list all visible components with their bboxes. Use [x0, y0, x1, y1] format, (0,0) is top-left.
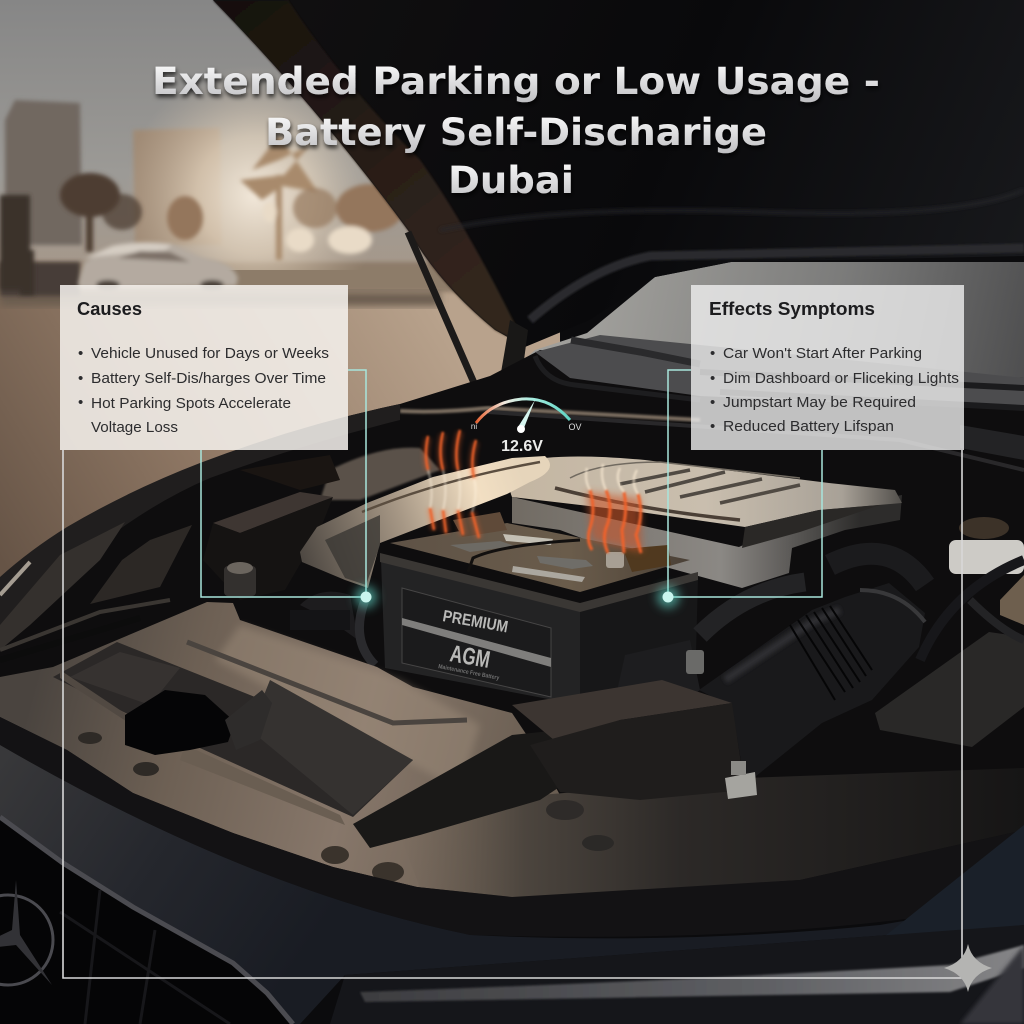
- cover right side: [512, 495, 902, 588]
- icon: sparkle: [944, 944, 992, 992]
- battery label text: Maintenance Free Battery: [438, 664, 500, 682]
- gauge low label: ni: [471, 422, 477, 431]
- white frame: [63, 450, 962, 978]
- sensor module: [615, 640, 700, 715]
- causes list: Battery Self-Dis/harges Over Time: [91, 370, 326, 387]
- cover left front: [300, 456, 550, 588]
- battery side body: [580, 578, 698, 705]
- connector: effects: [668, 370, 822, 597]
- bolts: [78, 732, 102, 744]
- engine bay: [0, 335, 1024, 900]
- effects list: Car Won't Start After Parking: [723, 345, 922, 362]
- causes list: Hot Parking Spots Accelerate: [91, 395, 291, 412]
- title: Battery Self-Discharige: [265, 111, 767, 154]
- battery label text: AGM: [448, 640, 492, 674]
- connector node right: [657, 586, 679, 608]
- battery front face: [381, 560, 580, 705]
- engine cover: [300, 456, 902, 588]
- left fender and brackets: [0, 404, 400, 660]
- grille and emblem: [0, 817, 293, 1024]
- effects list: Jumpstart May be Required: [723, 394, 916, 411]
- effects list: [710, 345, 959, 435]
- cover right top: [510, 456, 902, 527]
- gauge needle: [518, 400, 535, 428]
- dark channel and box: [353, 730, 600, 848]
- battery top: [390, 523, 690, 592]
- lower bay hoses: [290, 592, 375, 665]
- heat waves right: [586, 464, 642, 553]
- battery label text: PREMIUM: [441, 607, 509, 636]
- causes list: •: [78, 370, 83, 387]
- raised hood: [213, 0, 1024, 347]
- back left engine parts: [320, 448, 440, 500]
- heat waves left: [426, 430, 479, 538]
- hood latch: [125, 690, 235, 755]
- connector node left: [355, 586, 377, 608]
- flexible hose: [700, 582, 805, 635]
- connector: causes: [201, 370, 366, 597]
- bumper: [330, 925, 1024, 1024]
- windshield: [480, 262, 1024, 410]
- effects list: •: [710, 394, 715, 411]
- skyline buildings: [5, 100, 222, 245]
- lip rim: [0, 717, 1024, 937]
- plate recess: [53, 642, 413, 817]
- effects list: •: [710, 418, 715, 435]
- causes list: Vehicle Unused for Days or Weeks: [91, 345, 329, 362]
- panel: causes: [60, 285, 348, 450]
- causes list: Voltage Loss: [91, 419, 178, 436]
- plate groove: [187, 642, 467, 723]
- body pipe: [400, 408, 700, 420]
- title: Extended Parking or Low Usage -: [152, 60, 880, 103]
- lower dark panel: [400, 768, 1024, 900]
- hood prop rod: [408, 232, 528, 392]
- effects heading: Effects Symptoms: [709, 298, 875, 319]
- tan plate: [0, 602, 600, 897]
- gauge zero label: OV: [568, 422, 582, 432]
- effects list: Reduced Battery Lifspan: [723, 418, 894, 435]
- battery label text: [438, 607, 509, 682]
- battery: [380, 512, 698, 705]
- causes heading: Causes: [77, 298, 142, 319]
- causes list: •: [78, 394, 83, 411]
- effects list: •: [710, 370, 715, 387]
- right engine parts: [875, 517, 1024, 747]
- panel: effects symptoms: [691, 285, 964, 450]
- lip body: [0, 745, 1024, 1024]
- icon: car emblem star: [0, 880, 53, 985]
- voltage gauge: [471, 399, 582, 455]
- effects list: •: [710, 345, 715, 362]
- front radiator support panel: [0, 602, 1024, 900]
- parked car: [78, 243, 238, 290]
- effects list: Dim Dashboard or Fliceking Lights: [723, 370, 959, 387]
- palm trees: [0, 135, 404, 295]
- front hood lip: [0, 717, 1024, 1024]
- causes list: •: [78, 345, 83, 362]
- air intake duct: [615, 554, 925, 785]
- title: [152, 60, 880, 202]
- cowl trough and wiper: [535, 335, 1024, 410]
- causes list: [78, 345, 329, 436]
- gauge reading: 12.6V: [501, 438, 543, 455]
- fuse box: [213, 492, 333, 533]
- title: Dubai: [448, 159, 574, 202]
